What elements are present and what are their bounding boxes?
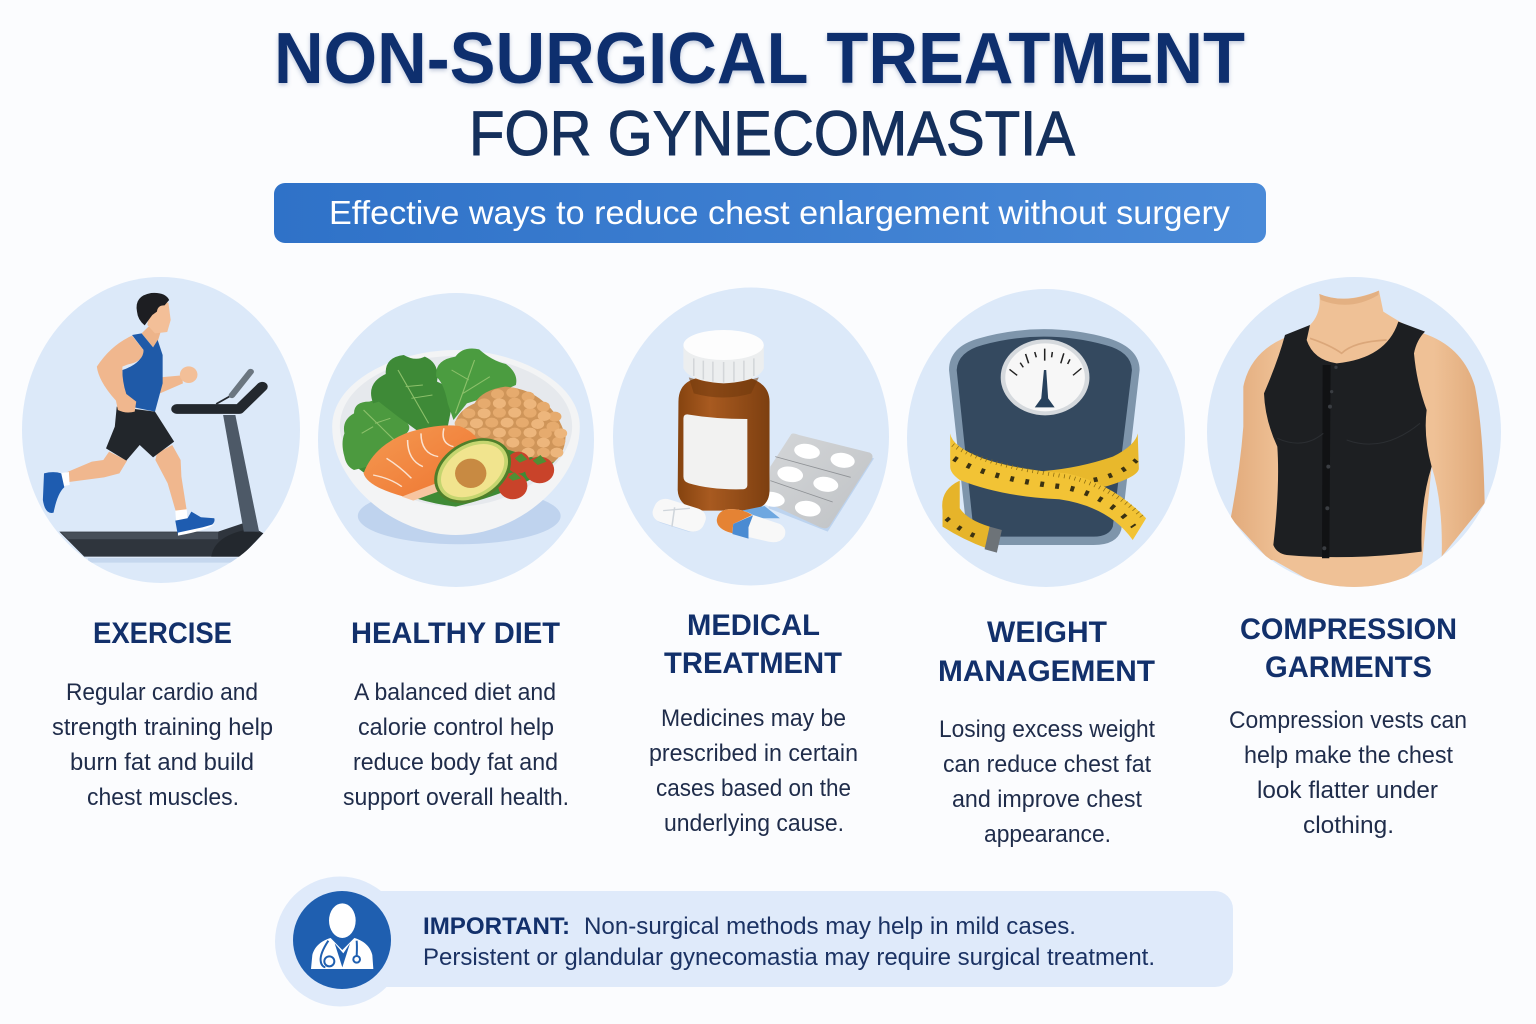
- icon: pill bottle and tablets: [613, 288, 889, 586]
- text: compression garments description: help make the chest: [1244, 742, 1453, 769]
- panel: weight management: [907, 289, 1185, 848]
- text: exercise description: [52, 679, 273, 811]
- subtitle banner: [274, 183, 1266, 243]
- text: important note: Persistent or glandular gynecomastia may require surgical treatment.: [423, 944, 1155, 971]
- text: healthy diet description: reduce body fat and: [353, 749, 558, 776]
- text: exercise description: strength training help: [52, 714, 273, 741]
- text: healthy diet description: A balanced diet and: [354, 679, 556, 706]
- icon: runner on treadmill: [22, 277, 300, 583]
- text: medical treatment description: prescribed in certain: [649, 740, 858, 767]
- text: important note: IMPORTANT:: [423, 913, 570, 940]
- text: medical treatment description: [649, 705, 858, 837]
- text: healthy diet description: support overall health.: [343, 784, 569, 811]
- text: healthy diet description: [343, 679, 569, 811]
- heading: medical treatment: MEDICAL: [687, 609, 820, 642]
- heading: weight management: [938, 616, 1155, 688]
- text: medical treatment description: cases based on the: [656, 775, 851, 802]
- text: compression garments description: look flatter under: [1257, 777, 1438, 804]
- heading: compression garments: COMPRESSION: [1240, 613, 1457, 646]
- panel: medical treatment: [613, 288, 889, 837]
- heading: medical treatment: [664, 609, 842, 680]
- heading: weight management: MANAGEMENT: [938, 655, 1155, 688]
- text: exercise description: chest muscles.: [87, 784, 239, 811]
- text: weight management description: can reduce chest fat: [943, 751, 1151, 778]
- icon: compression vest on torso: [1207, 277, 1501, 588]
- text: exercise description: Regular cardio and: [66, 679, 258, 706]
- heading: exercise: EXERCISE: [93, 617, 232, 650]
- heading: healthy diet: HEALTHY DIET: [351, 617, 560, 650]
- title: FOR GYNECOMASTIA: [469, 99, 1075, 169]
- text: important note: [423, 913, 1155, 971]
- text: important note: Non-surgical methods may help in mild cases.: [584, 913, 1076, 940]
- text: weight management description: appearance.: [984, 821, 1111, 848]
- text: medical treatment description: Medicines may be: [661, 705, 846, 732]
- panel: healthy diet: [318, 293, 594, 811]
- text: weight management description: [939, 716, 1155, 848]
- text: compression garments description: [1229, 707, 1467, 839]
- callout: important note: [275, 876, 1233, 1006]
- icon: scale and measuring tape: [907, 289, 1185, 587]
- chickpeas: [455, 387, 567, 463]
- icon: food bowl: [318, 293, 594, 587]
- text: weight management description: Losing excess weight: [939, 716, 1155, 743]
- heading: compression garments: GARMENTS: [1265, 651, 1432, 684]
- text: medical treatment description: underlying cause.: [664, 810, 844, 837]
- heading: weight management: WEIGHT: [987, 616, 1107, 649]
- text: weight management description: and improve chest: [952, 786, 1142, 813]
- panel: compression garments: [1207, 277, 1501, 839]
- heading: compression garments: [1240, 613, 1457, 684]
- icon: doctor: [293, 891, 391, 989]
- title: [274, 19, 1245, 169]
- text: exercise description: burn fat and build: [70, 749, 254, 776]
- text: healthy diet description: calorie control help: [358, 714, 554, 741]
- title: NON-SURGICAL TREATMENT: [274, 19, 1245, 99]
- heading: medical treatment: TREATMENT: [664, 647, 842, 680]
- text: compression garments description: clothing.: [1303, 812, 1394, 839]
- subtitle banner: Effective ways to reduce chest enlargement without surgery: [329, 194, 1231, 231]
- text: compression garments description: Compression vests can: [1229, 707, 1467, 734]
- panel: exercise: [22, 277, 300, 811]
